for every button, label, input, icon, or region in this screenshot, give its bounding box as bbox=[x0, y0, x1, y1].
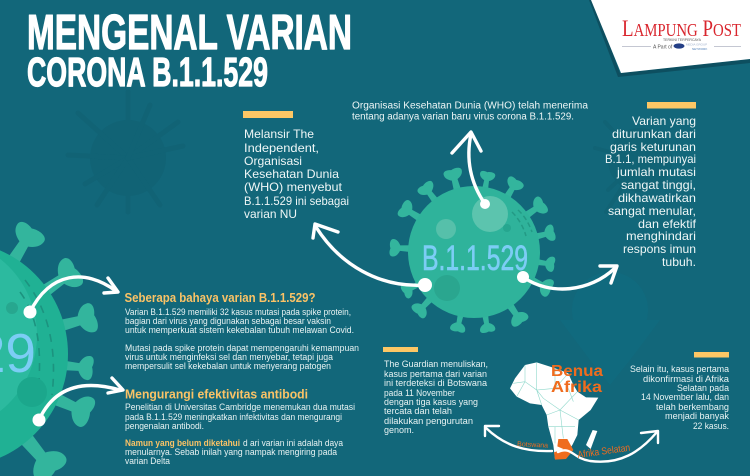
text: varian lineage description: Varian yang bbox=[632, 114, 696, 128]
arrow: virus to Melansir text bbox=[313, 224, 432, 292]
logo panel: MEDIA GROUP bbox=[686, 42, 707, 46]
arrow: map to Afrika Selatan text bbox=[558, 431, 658, 462]
background ghost virus: upper left bbox=[68, 92, 183, 212]
arrow: left virus to Mengurangi heading bbox=[32, 378, 123, 426]
text: Guardian: The Guardian menuliskan, bbox=[384, 359, 488, 369]
accent bar: Afrika Selatan block bbox=[694, 352, 729, 358]
text: Seberapa body: Varian B.1.1.529 memiliki 32 kasus mutasi pada spike protein, bbox=[125, 307, 351, 317]
text: Guardian: pada 11 November bbox=[384, 388, 455, 398]
text: varian lineage description: respons imun bbox=[623, 242, 696, 256]
text: Melansir The Independent: varian NU bbox=[244, 207, 297, 221]
text: varian lineage description: menghindari bbox=[626, 229, 696, 243]
text: Seberapa body: mempersulit sel kekebalan untuk menyerang patogen bbox=[125, 361, 331, 371]
text: Guardian: ini terdeteksi di Botswana bbox=[384, 378, 487, 388]
text: varian lineage description: dikhawatirkan bbox=[618, 191, 696, 205]
map label: Benua Afrika bbox=[551, 363, 603, 396]
text: Melansir The Independent: Independent, bbox=[244, 141, 319, 155]
text: Mengurangi body: pengenalan antibodi. bbox=[125, 421, 204, 431]
background ghost virus: lower right bbox=[560, 272, 660, 385]
central virus bbox=[389, 167, 557, 334]
text: Melansir The Independent: Kesehatan Dunia bbox=[244, 167, 339, 181]
title: MENGENAL VARIAN bbox=[27, 6, 352, 60]
text: Mengurangi body: d ari varian ini adalah daya bbox=[243, 438, 343, 448]
text: Seberapa body bbox=[125, 307, 359, 371]
text: varian lineage description: sangat menular, bbox=[608, 204, 696, 218]
heading: Seberapa bahaya: Seberapa bahaya varian B.1.1.529? bbox=[124, 290, 316, 305]
text: Mengurangi body: Namun yang belum diketahui bbox=[125, 438, 240, 448]
arrow: virus to WHO text bbox=[452, 132, 490, 209]
map label: Benua Afrika: Afrika bbox=[551, 379, 602, 396]
text: Guardian: kasus pertama dari varian bbox=[384, 369, 487, 379]
text: Afrika Selatan: 22 kasus. bbox=[693, 421, 729, 431]
logo panel: LAMPUNG POST bbox=[622, 16, 741, 41]
text: WHO received report: Organisasi Kesehatan Dunia (WHO) telah menerima bbox=[352, 100, 588, 112]
text: Seberapa body: virus untuk menginfeksi sel dan menyebar, tetapi juga bbox=[125, 352, 333, 362]
text: Seberapa body: bagian dari virus yang digunakan sebagai besar vaksin bbox=[125, 316, 331, 326]
title bbox=[27, 6, 352, 95]
left virus bbox=[0, 220, 100, 476]
heading: Mengurangi efektivitas: Mengurangi efektivitas antibodi bbox=[125, 386, 308, 402]
text: Seberapa body: Mutasi pada spike protein dapat mempengaruhi kemampuan bbox=[125, 343, 359, 353]
background ghost virus: right bbox=[595, 122, 670, 212]
text: varian lineage description: tubuh. bbox=[662, 255, 696, 269]
text: Afrika Selatan: telah berkembang bbox=[656, 402, 729, 412]
text: Guardian: dengan tiga kasus yang bbox=[384, 397, 478, 407]
virus label B.1.1.529: B.1.1.529 bbox=[422, 239, 528, 278]
text: Afrika Selatan: Selatan pada bbox=[677, 383, 729, 393]
text: Afrika Selatan: menjadi banyak bbox=[665, 411, 730, 421]
text: Mengurangi body bbox=[125, 402, 355, 466]
text: varian lineage description: B.1.1, mempunyai bbox=[605, 152, 696, 166]
text: Mengurangi body: varian Delta bbox=[125, 456, 170, 466]
map: Africa bbox=[510, 362, 598, 460]
text: Afrika Selatan: 14 November lalu, dan bbox=[641, 392, 729, 402]
text: Mengurangi body: Penelitian di Universitas Cambridge menemukan dua mutasi bbox=[125, 402, 355, 412]
text: varian lineage description: jumlah mutasi bbox=[616, 165, 696, 179]
text: WHO received report bbox=[352, 100, 588, 122]
spikes of central virus bbox=[389, 167, 557, 334]
text: Mengurangi body: pada B.1.1.529 meningkatkan infektivitas dan mengurangi bbox=[125, 412, 342, 422]
text: varian lineage description: garis keturunan bbox=[610, 140, 696, 154]
text: WHO received report: tentang adanya varian baru virus corona B.1.1.529. bbox=[352, 112, 574, 122]
text: varian lineage description: sangat tinggi, bbox=[621, 178, 696, 192]
title: CORONA B.1.1.529 bbox=[27, 49, 268, 95]
map label: Benua Afrika: Benua bbox=[551, 363, 603, 380]
logo panel: A Part of bbox=[653, 44, 673, 50]
text: Guardian: dilakukan pengurutan bbox=[384, 416, 473, 426]
text: Seberapa body: untuk memperkuat sistem kekebalan tubuh melawan Covid. bbox=[125, 325, 354, 335]
logo panel: NETWORK bbox=[692, 47, 707, 51]
text: Afrika Selatan: Selain itu, kasus pertama bbox=[630, 364, 729, 374]
logo panel: TERKINI TERPERCAYA bbox=[663, 38, 702, 42]
map label: Afrika Selatan: Afrika Selatan bbox=[577, 443, 631, 461]
accent bar: Guardian block bbox=[383, 347, 418, 352]
text: Melansir The Independent: (WHO) menyebut bbox=[244, 180, 343, 194]
text: Guardian: genom. bbox=[384, 425, 414, 435]
text: Melansir The Independent bbox=[244, 127, 349, 221]
arrow: virus to lineage text bbox=[517, 266, 617, 289]
text: Mengurangi body: menularnya. Sebab inilah yang nampak mengiring pada bbox=[125, 447, 337, 457]
map label: Botswana: Botswana bbox=[517, 441, 548, 450]
text: Guardian: tercata dan telah bbox=[384, 406, 452, 416]
accent bar: right block bbox=[647, 102, 696, 108]
text: varian lineage description: diturunkan dari bbox=[612, 127, 696, 141]
arrow: map to Guardian text bbox=[485, 426, 552, 451]
text: Melansir The Independent: B.1.1.529 ini sebagai bbox=[244, 194, 349, 208]
spikes of left virus bbox=[0, 220, 100, 476]
text: varian lineage description: dan efektif bbox=[638, 217, 697, 231]
arrow: left virus to Seberapa heading bbox=[24, 277, 118, 318]
text: Melansir The Independent: Melansir The bbox=[244, 127, 314, 141]
text: Guardian bbox=[384, 359, 488, 435]
accent bar: Melansir block bbox=[243, 111, 293, 118]
text: Melansir The Independent: Organisasi bbox=[244, 154, 302, 168]
text: varian lineage description bbox=[605, 114, 697, 269]
text: Afrika Selatan bbox=[630, 364, 730, 431]
South Africa and Botswana highlight bbox=[554, 439, 573, 460]
text: Afrika Selatan: dikonfirmasi di Afrika bbox=[643, 374, 729, 384]
logo panel bbox=[589, 0, 750, 77]
